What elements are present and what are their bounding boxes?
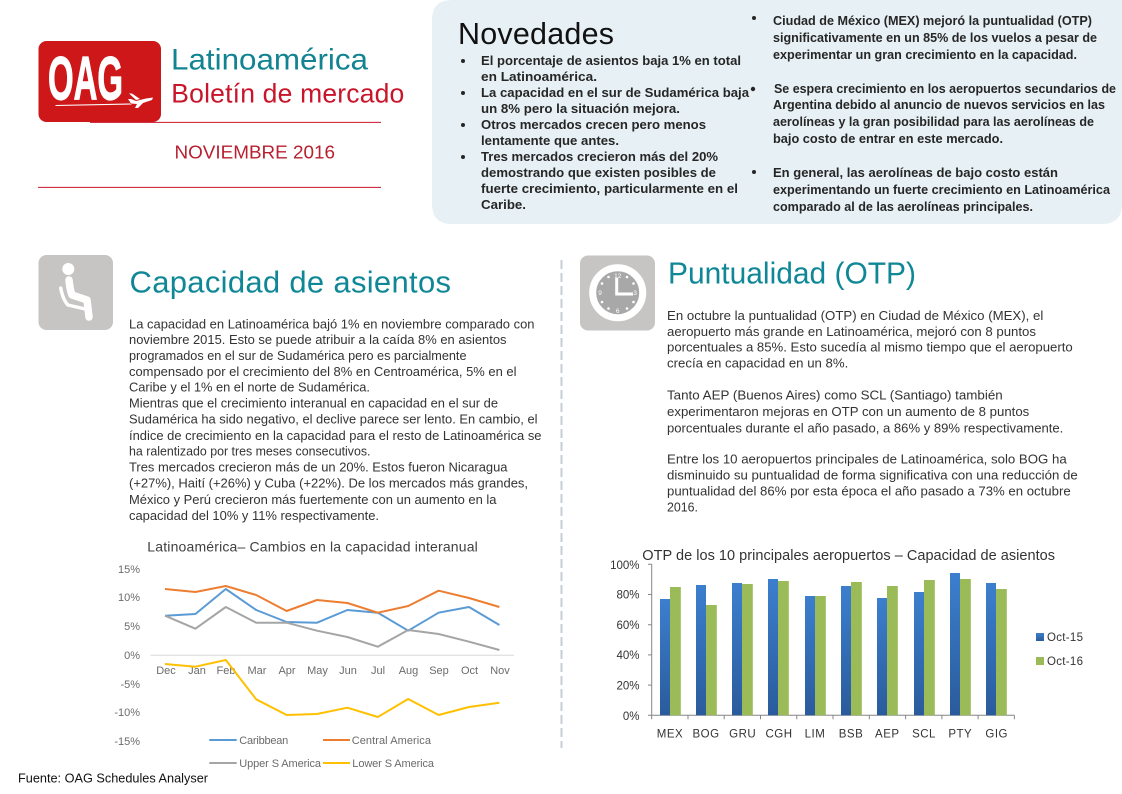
series: Lower S America: [165, 660, 499, 717]
text block: punctuality commentary: porcentuales durante el año pasado, a 86% y 89% respectivamente.: [667, 421, 1063, 435]
y axis labels: 5%: [124, 621, 140, 633]
text block: punctuality commentary: aeropuerto más grande en Latinoamérica, mejoró con 8 puntos: [667, 325, 1036, 339]
text block: left bullet list: La capacidad en el sur de Sudamérica baja: [481, 85, 750, 100]
text block: punctuality commentary: porcentuales a 85%. Esto sucedía al mismo tiempo que el aeropuerto: [667, 341, 1073, 355]
series: Upper S America: [165, 607, 499, 650]
text block: left bullet list: lentamente que antes.: [481, 133, 619, 148]
legend: [209, 735, 435, 770]
icon: clock: 9: [598, 290, 602, 297]
y axis labels: [610, 560, 640, 723]
x axis labels: [156, 665, 510, 677]
series: Oct-16 bars: [670, 579, 1007, 715]
x axis labels: MEX: [657, 728, 683, 740]
text block: punctuality commentary: experimentaron mejoras en OTP con un aumento de 8 puntos: [667, 405, 1029, 419]
icon: clock: [580, 256, 655, 330]
line chart: capacity change: [114, 539, 514, 770]
text block: capacity commentary: Mientras que el crecimiento interanual en capacidad en el sur de: [129, 397, 498, 411]
text block: right bullet list: Se espera crecimiento en los aeropuertos secundarios de: [774, 82, 1116, 96]
text block: capacity commentary: Tres mercados crecieron más de un 20%. Estos fueron Nicaragua: [129, 461, 508, 475]
text block: right bullet list: Ciudad de México (MEX) mejoró la puntualidad (OTP): [773, 14, 1092, 28]
x axis labels: Jun: [339, 665, 357, 677]
x axis labels: GRU: [729, 728, 756, 740]
series: Oct-15 bars: [660, 573, 996, 715]
logo: OAG: [38, 41, 161, 122]
x axis labels: Sep: [429, 665, 449, 677]
legend: Central America: [352, 735, 432, 747]
heading: Puntualidad (OTP): Puntualidad (OTP): [668, 256, 916, 290]
legend: Upper S America: [239, 758, 322, 770]
x axis labels: Jul: [371, 665, 385, 677]
panel: Capacidad de asientos: [38, 255, 542, 770]
legend: Oct-16: [1047, 656, 1083, 668]
header: logo and report title: [38, 41, 404, 187]
text block: punctuality commentary: puntualidad del 86% por esta época el año pasado a 73% en octubre: [667, 485, 1071, 499]
text block: capacity commentary: noviembre 2015. Esto se puede atribuir a la caída 8% en asientos: [129, 333, 506, 347]
y axis labels: 10%: [118, 592, 140, 604]
panel: Novedades: [432, 0, 1122, 224]
chart title: OTP de los 10 principales aeropuertos – Capacidad de asientos: [642, 548, 1055, 564]
y axis labels: -15%: [114, 736, 140, 748]
text block: punctuality commentary: 2016.: [667, 501, 698, 515]
text block: right bullet list: experimentar un gran crecimiento en la capacidad.: [773, 48, 1077, 62]
text block: punctuality commentary: crecía en capacidad en un 8%.: [667, 357, 848, 371]
text block: capacity commentary: [129, 317, 542, 523]
date: NOVIEMBRE 2016: NOVIEMBRE 2016: [174, 143, 335, 163]
bar chart: OTP top 10 airports: [610, 548, 1083, 740]
series: Caribbean: [165, 589, 499, 631]
x axis labels: CGH: [765, 728, 793, 740]
logo: OAG: OAG: [48, 44, 123, 112]
text block: capacity commentary: Caribe y el 1% en el norte de Sudamérica.: [129, 380, 370, 394]
text block: capacity commentary: programados en el sur de Sudamérica pero es parcialmente: [129, 349, 466, 363]
heading: Capacidad de asientos: Capacidad de asientos: [130, 264, 451, 299]
text block: right bullet list: experimentando un fuerte crecimiento en Latinoamérica: [773, 183, 1111, 197]
x axis labels: Feb: [217, 665, 235, 677]
x axis labels: Apr: [278, 665, 296, 677]
x axis labels: GIG: [985, 728, 1008, 740]
legend: Lower S America: [352, 758, 435, 770]
legend: [1036, 632, 1083, 668]
chart title: Latinoamérica– Cambios en la capacidad interanual: [147, 539, 478, 555]
text block: right bullet list: En general, las aerolíneas de bajo costo están: [773, 166, 1058, 180]
icon: clock: 3: [633, 290, 637, 297]
y axis labels: -10%: [114, 707, 140, 719]
text block: right bullet list: aerolíneas y la gran posibilidad para las aerolíneas de: [773, 115, 1094, 129]
text block: punctuality commentary: [667, 309, 1078, 515]
y axis labels: 0%: [124, 650, 140, 662]
x axis labels: SCL: [912, 728, 936, 740]
text block: left bullet list: Tres mercados crecieron más del 20%: [481, 149, 718, 164]
x axis labels: May: [307, 665, 328, 677]
text block: left bullet list: un 8% pero la situación mejora.: [481, 101, 680, 116]
text block: punctuality commentary: Entre los 10 aeropuertos principales de Latinoamérica, solo BOG ha: [667, 453, 1068, 467]
text block: punctuality commentary: Tanto AEP (Buenos Aires) como SCL (Santiago) también: [667, 389, 1003, 403]
text block: capacity commentary: ha ralentizado por tres meses consecutivos.: [129, 445, 370, 459]
icon: clock: 6: [616, 308, 620, 315]
text block: right bullet list: comparado al de las aerolíneas principales.: [773, 200, 1033, 214]
x axis labels: AEP: [875, 728, 900, 740]
x axis labels: BSB: [839, 728, 863, 740]
axes: [648, 564, 1014, 719]
x axis labels: Mar: [248, 665, 267, 677]
x axis labels: Nov: [490, 665, 510, 677]
y axis labels: 15%: [118, 564, 140, 576]
text block: punctuality commentary: disminuido su puntualidad de forma significativa con una reducción de: [667, 469, 1078, 483]
x axis labels: PTY: [948, 728, 972, 740]
x axis labels: BOG: [692, 728, 720, 740]
x axis labels: Aug: [399, 665, 418, 677]
text block: left bullet list: demostrando que existen posibles de: [481, 165, 716, 180]
legend: Caribbean: [239, 735, 288, 747]
text block: left bullet list: El porcentaje de asientos baja 1% en total: [481, 53, 741, 68]
text block: capacity commentary: México y Perú crecieron más fuertemente con un aumento en la: [129, 493, 497, 507]
y axis labels: 40%: [616, 650, 640, 662]
text block: capacity commentary: La capacidad en Latinoamérica bajó 1% en noviembre comparado con: [129, 317, 534, 331]
series: Central America: [165, 586, 499, 613]
subtitle: Boletín de mercado: Boletín de mercado: [171, 78, 404, 108]
x axis labels: [657, 728, 1008, 740]
y axis labels: 0%: [623, 711, 640, 723]
text block: right bullet list: Argentina debido al anuncio de nuevos servicios en las: [773, 98, 1105, 112]
text block: left bullet list: Caribe.: [481, 197, 526, 212]
source note: Fuente: OAG Schedules Analyser: [18, 770, 209, 786]
y axis labels: 60%: [616, 620, 640, 632]
text block: capacity commentary: capacidad del 10% y 11% respectivamente.: [129, 509, 379, 523]
text block: punctuality commentary: En octubre la puntualidad (OTP) en Ciudad de México (MEX), el: [667, 309, 1043, 323]
y axis labels: [114, 564, 140, 748]
text block: left bullet list: Otros mercados crecen pero menos: [481, 117, 706, 132]
icon: clock: 12: [614, 273, 622, 280]
text block: left bullet list: [461, 53, 750, 212]
heading: Novedades: Novedades: [458, 17, 614, 51]
y axis labels: 80%: [616, 590, 640, 602]
y axis labels: -5%: [120, 679, 140, 691]
text block: right bullet list: significativamente en un 85% de los vuelos a pesar de: [773, 31, 1097, 45]
x axis labels: Oct: [461, 665, 478, 677]
legend: Oct-15: [1047, 632, 1083, 644]
text block: right bullet list: [751, 14, 1116, 214]
text block: left bullet list: fuerte crecimiento, particularmente en el: [481, 181, 738, 196]
text block: capacity commentary: (+27%), Haití (+26%) y Cuba (+22%). De los mercados más grandes,: [129, 477, 528, 491]
x axis labels: LIM: [805, 728, 825, 740]
x axis labels: Jan: [188, 665, 206, 677]
text block: left bullet list: en Latinoamérica.: [481, 69, 597, 84]
text block: capacity commentary: índice de crecimiento en la capacidad para el resto de Latinoamérica se: [129, 429, 542, 443]
y axis labels: 20%: [616, 680, 640, 692]
text block: capacity commentary: compensado por el crecimiento del 8% en Centroamérica, 5% en el: [129, 365, 516, 379]
x axis labels: Dec: [156, 665, 176, 677]
y axis labels: 100%: [610, 560, 640, 572]
text block: right bullet list: bajo costo de entrar en este mercado.: [773, 132, 1003, 146]
icon: seated passenger: [38, 255, 113, 330]
text block: capacity commentary: Sudamérica ha sido negativo, el declive parece ser lento. En cambio, el: [129, 412, 538, 426]
title: Latinoamérica: Latinoamérica: [171, 44, 368, 76]
panel: Puntualidad (OTP): [580, 256, 1083, 740]
